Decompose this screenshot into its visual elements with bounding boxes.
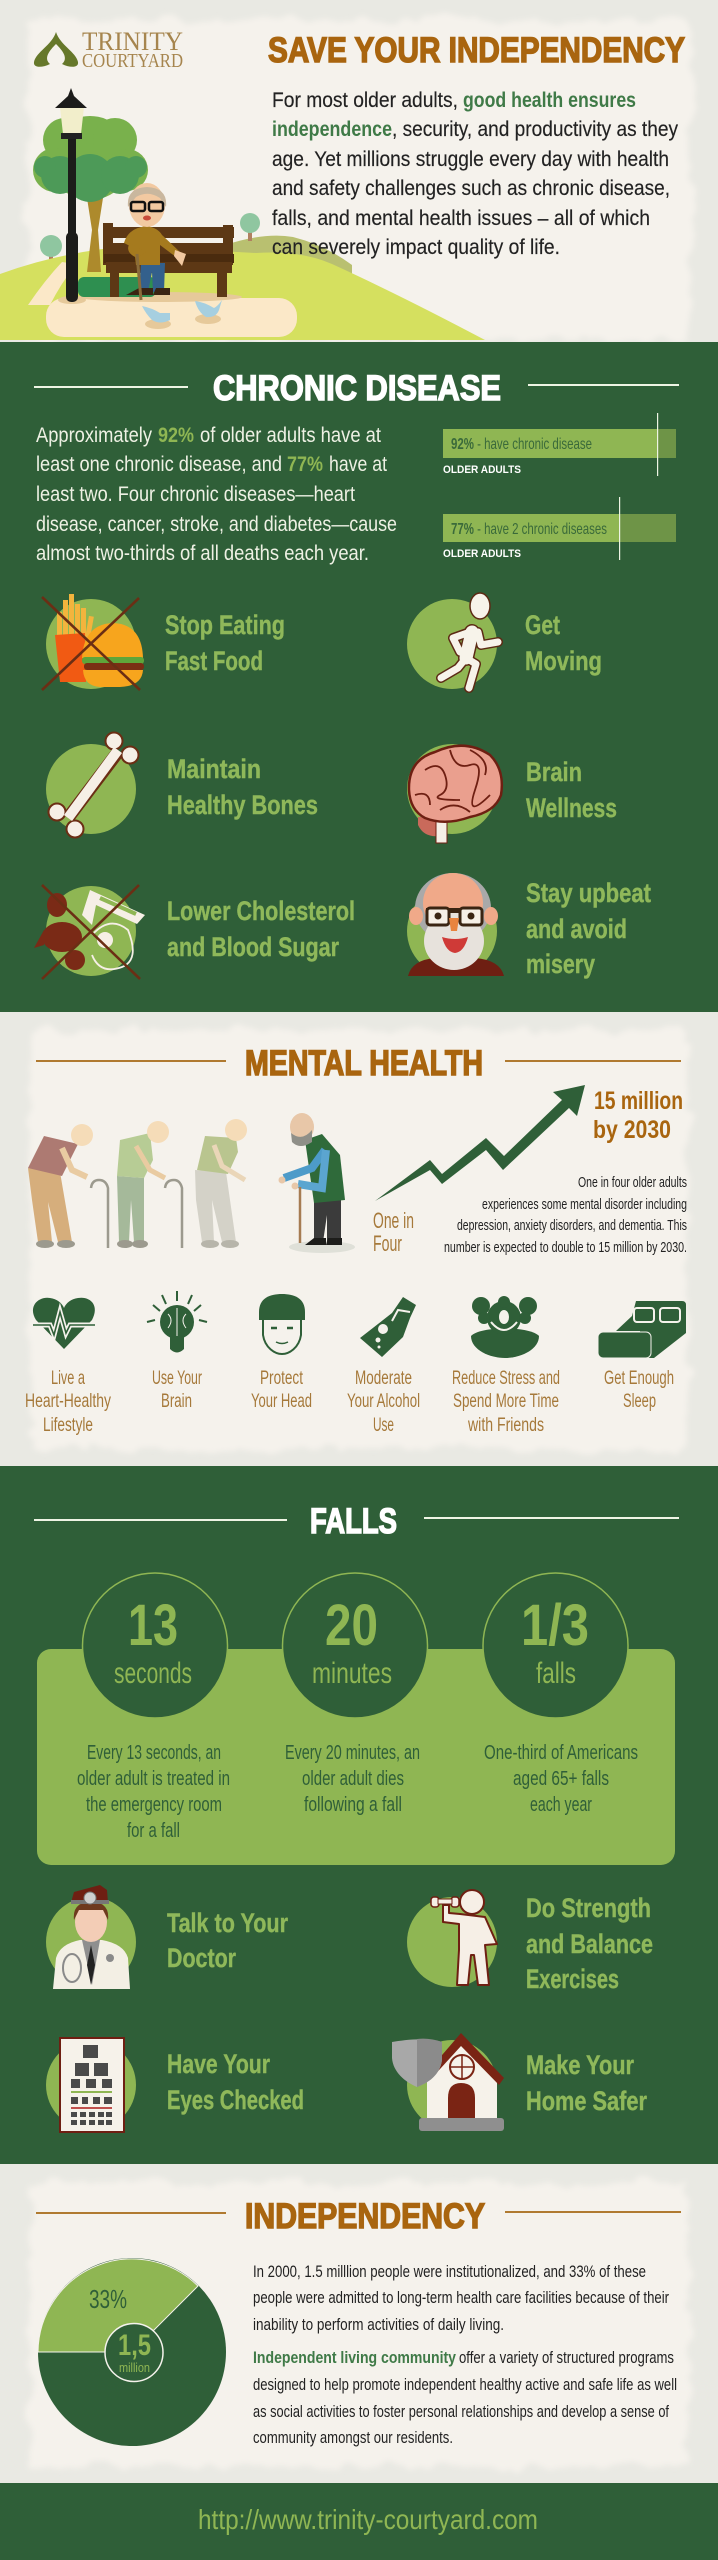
label: one in four: One in xyxy=(373,1208,414,1233)
icon: dumbbell exercise figure xyxy=(407,1890,497,1987)
icon: brain xyxy=(407,744,502,843)
logo: TRINITY xyxy=(82,27,183,56)
chronic disease text: 92% xyxy=(158,424,194,447)
label: make your home safer xyxy=(526,2050,647,2116)
bar: 92%: OLDER ADULTS xyxy=(443,464,521,476)
label: strength and balance: Do Strength xyxy=(526,1893,651,1923)
text: 20 minutes xyxy=(285,1742,420,1816)
intro text block: age. Yet millions struggle every day with health xyxy=(272,148,669,171)
label: moderate your alcohol use: Moderate xyxy=(355,1368,412,1389)
text: one third: One-third of Americans xyxy=(484,1742,638,1764)
chronic disease text: 77% xyxy=(287,453,323,476)
label: heart healthy lifestyle: Lifestyle xyxy=(43,1415,93,1436)
icon: walking figure xyxy=(407,593,498,689)
intro text block xyxy=(272,89,678,259)
icon: smiling older man xyxy=(407,873,504,976)
label: talk to your doctor: Doctor xyxy=(167,1943,236,1973)
pie chart: million xyxy=(119,2360,150,2375)
label: moderate your alcohol use: Use xyxy=(373,1415,394,1436)
label: moderate your alcohol use: Your Alcohol xyxy=(347,1391,420,1412)
label: one in four xyxy=(373,1208,414,1256)
figure 2 xyxy=(117,1121,182,1248)
panel: independency xyxy=(0,2164,718,2483)
text: 20 minutes: older adult dies xyxy=(302,1768,404,1790)
label: use your brain: Brain xyxy=(161,1391,192,1412)
label: get moving: Moving xyxy=(525,646,602,676)
stat: 20 minutes: 20 xyxy=(325,1593,378,1658)
stat: 1/3 falls: 1/3 xyxy=(521,1593,589,1658)
label: stay upbeat: Stay upbeat xyxy=(526,878,651,908)
label: have your eyes checked: Eyes Checked xyxy=(167,2085,304,2115)
panel: chronic disease xyxy=(0,342,718,1012)
figure 4 xyxy=(278,1113,355,1253)
bench xyxy=(103,223,234,297)
panel: intro xyxy=(0,0,718,342)
older adults figures xyxy=(28,1113,355,1253)
heading: INDEPENDENCY xyxy=(245,2197,485,2236)
label: use your brain xyxy=(152,1368,202,1412)
label: stop eating fast food: Stop Eating xyxy=(165,610,285,640)
icon: safe home with shield xyxy=(392,2033,504,2131)
label: protect your head xyxy=(251,1368,312,1412)
intro text block: can severely impact quality of life. xyxy=(272,236,560,259)
pie chart: 1,5 xyxy=(118,2329,151,2362)
icon: heart xyxy=(33,1298,95,1349)
stat: 13 seconds xyxy=(82,1573,228,1718)
label: make your home safer: Make Your xyxy=(526,2050,634,2080)
label: maintain healthy bones: Healthy Bones xyxy=(167,790,318,820)
bar: 92%: 92% - have chronic disease xyxy=(451,436,592,453)
text: 13 seconds: for a fall xyxy=(127,1820,180,1842)
stat: 20 minutes: minutes xyxy=(312,1657,392,1690)
chronic disease text: least one chronic disease, and xyxy=(36,453,282,476)
intro text block: good health ensures xyxy=(463,89,636,112)
bar: 92% xyxy=(443,413,676,476)
label: have your eyes checked xyxy=(167,2049,304,2115)
mental health text xyxy=(444,1175,687,1256)
label: brain wellness xyxy=(526,757,617,823)
intro text block: For most older adults, xyxy=(272,89,458,112)
text: one third: aged 65+ falls xyxy=(513,1768,609,1790)
bar: 77% xyxy=(443,497,676,560)
pie chart: 33% xyxy=(89,2284,127,2314)
label: reduce stress: Reduce Stress and xyxy=(452,1368,560,1389)
pie chart xyxy=(38,2258,226,2446)
icon: bottle xyxy=(360,1297,416,1357)
logo: COURTYARD xyxy=(82,50,183,72)
label: talk to your doctor xyxy=(167,1908,288,1973)
stat: 1/3 falls xyxy=(483,1573,628,1718)
label: make your home safer: Home Safer xyxy=(526,2086,647,2116)
label: talk to your doctor: Talk to Your xyxy=(167,1908,288,1938)
icon: doctor xyxy=(46,1885,136,1989)
label: strength and balance: and Balance xyxy=(526,1929,653,1959)
intro text block: , security, and productivity as they xyxy=(392,118,678,141)
arrow: rising trend xyxy=(375,1085,585,1201)
stat: 13 seconds: seconds xyxy=(114,1657,192,1690)
panel: footer xyxy=(0,2483,718,2560)
figure 1 xyxy=(28,1124,108,1248)
stats panel xyxy=(37,1573,675,1865)
label: heart healthy lifestyle: Heart-Healthy xyxy=(25,1391,111,1412)
label: reduce stress: Spend More Time xyxy=(453,1391,559,1412)
lamp post xyxy=(55,88,87,302)
text: one third xyxy=(484,1742,638,1816)
text: 13 seconds: Every 13 seconds, an xyxy=(87,1742,221,1764)
text: 20 minutes: following a fall xyxy=(304,1794,402,1816)
chronic disease text: least two. Four chronic diseases—heart xyxy=(36,483,355,506)
chronic disease text: of older adults have at xyxy=(200,424,381,447)
icon: fast food crossed out xyxy=(42,594,144,690)
label: have your eyes checked: Have Your xyxy=(167,2049,270,2079)
footer url: http://www.trinity-courtyard.com xyxy=(198,2504,538,2535)
icon: cholesterol foods crossed out xyxy=(34,885,145,979)
stat: 15 million: 15 million xyxy=(594,1087,683,1115)
pigeons xyxy=(142,300,222,329)
stat: 1/3 falls: falls xyxy=(536,1657,576,1690)
intro text block: falls, and mental health issues – all of which xyxy=(272,207,650,230)
label: moderate your alcohol use xyxy=(347,1368,420,1436)
label: reduce stress xyxy=(452,1368,560,1436)
chronic disease text: almost two-thirds of all deaths each year. xyxy=(36,542,369,565)
label: brain wellness: Wellness xyxy=(526,793,617,823)
stat: 20 minutes xyxy=(282,1573,428,1718)
label: brain wellness: Brain xyxy=(526,757,582,787)
icon: clown xyxy=(471,1296,539,1358)
label: maintain healthy bones xyxy=(167,754,318,820)
figure 3 xyxy=(195,1119,247,1248)
independency text: community amongst our residents. xyxy=(253,2428,453,2447)
label: get moving: Get xyxy=(525,610,560,640)
label: strength and balance: Exercises xyxy=(526,1964,619,1994)
label: lower cholesterol xyxy=(167,896,355,962)
icon: bone xyxy=(46,732,139,838)
independency text: inability to perform activities of daily living. xyxy=(253,2315,504,2334)
chronic disease text xyxy=(36,424,397,565)
park illustration xyxy=(0,88,485,340)
icon: bed with glasses xyxy=(598,1301,686,1358)
intro text block: and safety challenges such as chronic disease, xyxy=(272,177,670,200)
label: protect your head: Protect xyxy=(260,1368,304,1389)
stat: 15 million: by 2030 xyxy=(593,1116,671,1144)
label: protect your head: Your Head xyxy=(251,1391,312,1412)
stat: 15 million xyxy=(593,1087,683,1144)
intro text block: independence xyxy=(272,118,392,141)
bar: 77%: 77% - have 2 chronic diseases xyxy=(451,521,607,538)
logo xyxy=(34,27,183,72)
label: stay upbeat: and avoid xyxy=(526,914,627,944)
text: 13 seconds xyxy=(77,1742,230,1842)
older man on bench xyxy=(124,183,186,300)
icon: helmet head xyxy=(259,1294,305,1354)
label: reduce stress: with Friends xyxy=(467,1415,544,1436)
label: stay upbeat: misery xyxy=(526,949,595,979)
label: heart healthy lifestyle: Live a xyxy=(51,1368,85,1389)
label: strength and balance xyxy=(526,1893,653,1994)
label: get enough sleep: Get Enough xyxy=(604,1368,674,1389)
heading: FALLS xyxy=(310,1502,397,1541)
label: lower cholesterol: and Blood Sugar xyxy=(167,932,339,962)
label: get enough sleep: Sleep xyxy=(623,1391,656,1412)
chronic disease text: disease, cancer, stroke, and diabetes—cause xyxy=(36,513,397,536)
label: stay upbeat xyxy=(526,878,651,979)
text: 13 seconds: the emergency room xyxy=(86,1794,222,1816)
text: one third: each year xyxy=(530,1794,592,1816)
text: 20 minutes: Every 20 minutes, an xyxy=(285,1742,420,1764)
stat: 13 seconds: 13 xyxy=(128,1593,178,1658)
panel: falls xyxy=(0,1466,718,2164)
text: 13 seconds: older adult is treated in xyxy=(77,1768,230,1790)
label: lower cholesterol: Lower Cholesterol xyxy=(167,896,355,926)
label: maintain healthy bones: Maintain xyxy=(167,754,261,784)
icon: brain bulb xyxy=(147,1291,207,1352)
chronic disease text: Approximately xyxy=(36,424,152,447)
independency text: Independent living community xyxy=(253,2348,456,2367)
bar: 77%: OLDER ADULTS xyxy=(443,548,521,560)
label: stop eating fast food: Fast Food xyxy=(165,646,263,676)
icon: eye chart xyxy=(46,2038,136,2132)
label: get moving xyxy=(525,610,602,676)
heading: MENTAL HEALTH xyxy=(245,1044,483,1083)
label: use your brain: Use Your xyxy=(152,1368,202,1389)
label: get enough sleep xyxy=(604,1368,674,1412)
chronic disease text: have at xyxy=(329,453,387,476)
independency text xyxy=(253,2262,677,2447)
panel: mental health xyxy=(0,1012,718,1466)
heading: CHRONIC DISEASE xyxy=(213,369,501,408)
label: stop eating fast food xyxy=(165,610,285,676)
label: one in four: Four xyxy=(373,1231,402,1256)
label: heart healthy lifestyle xyxy=(25,1368,111,1436)
